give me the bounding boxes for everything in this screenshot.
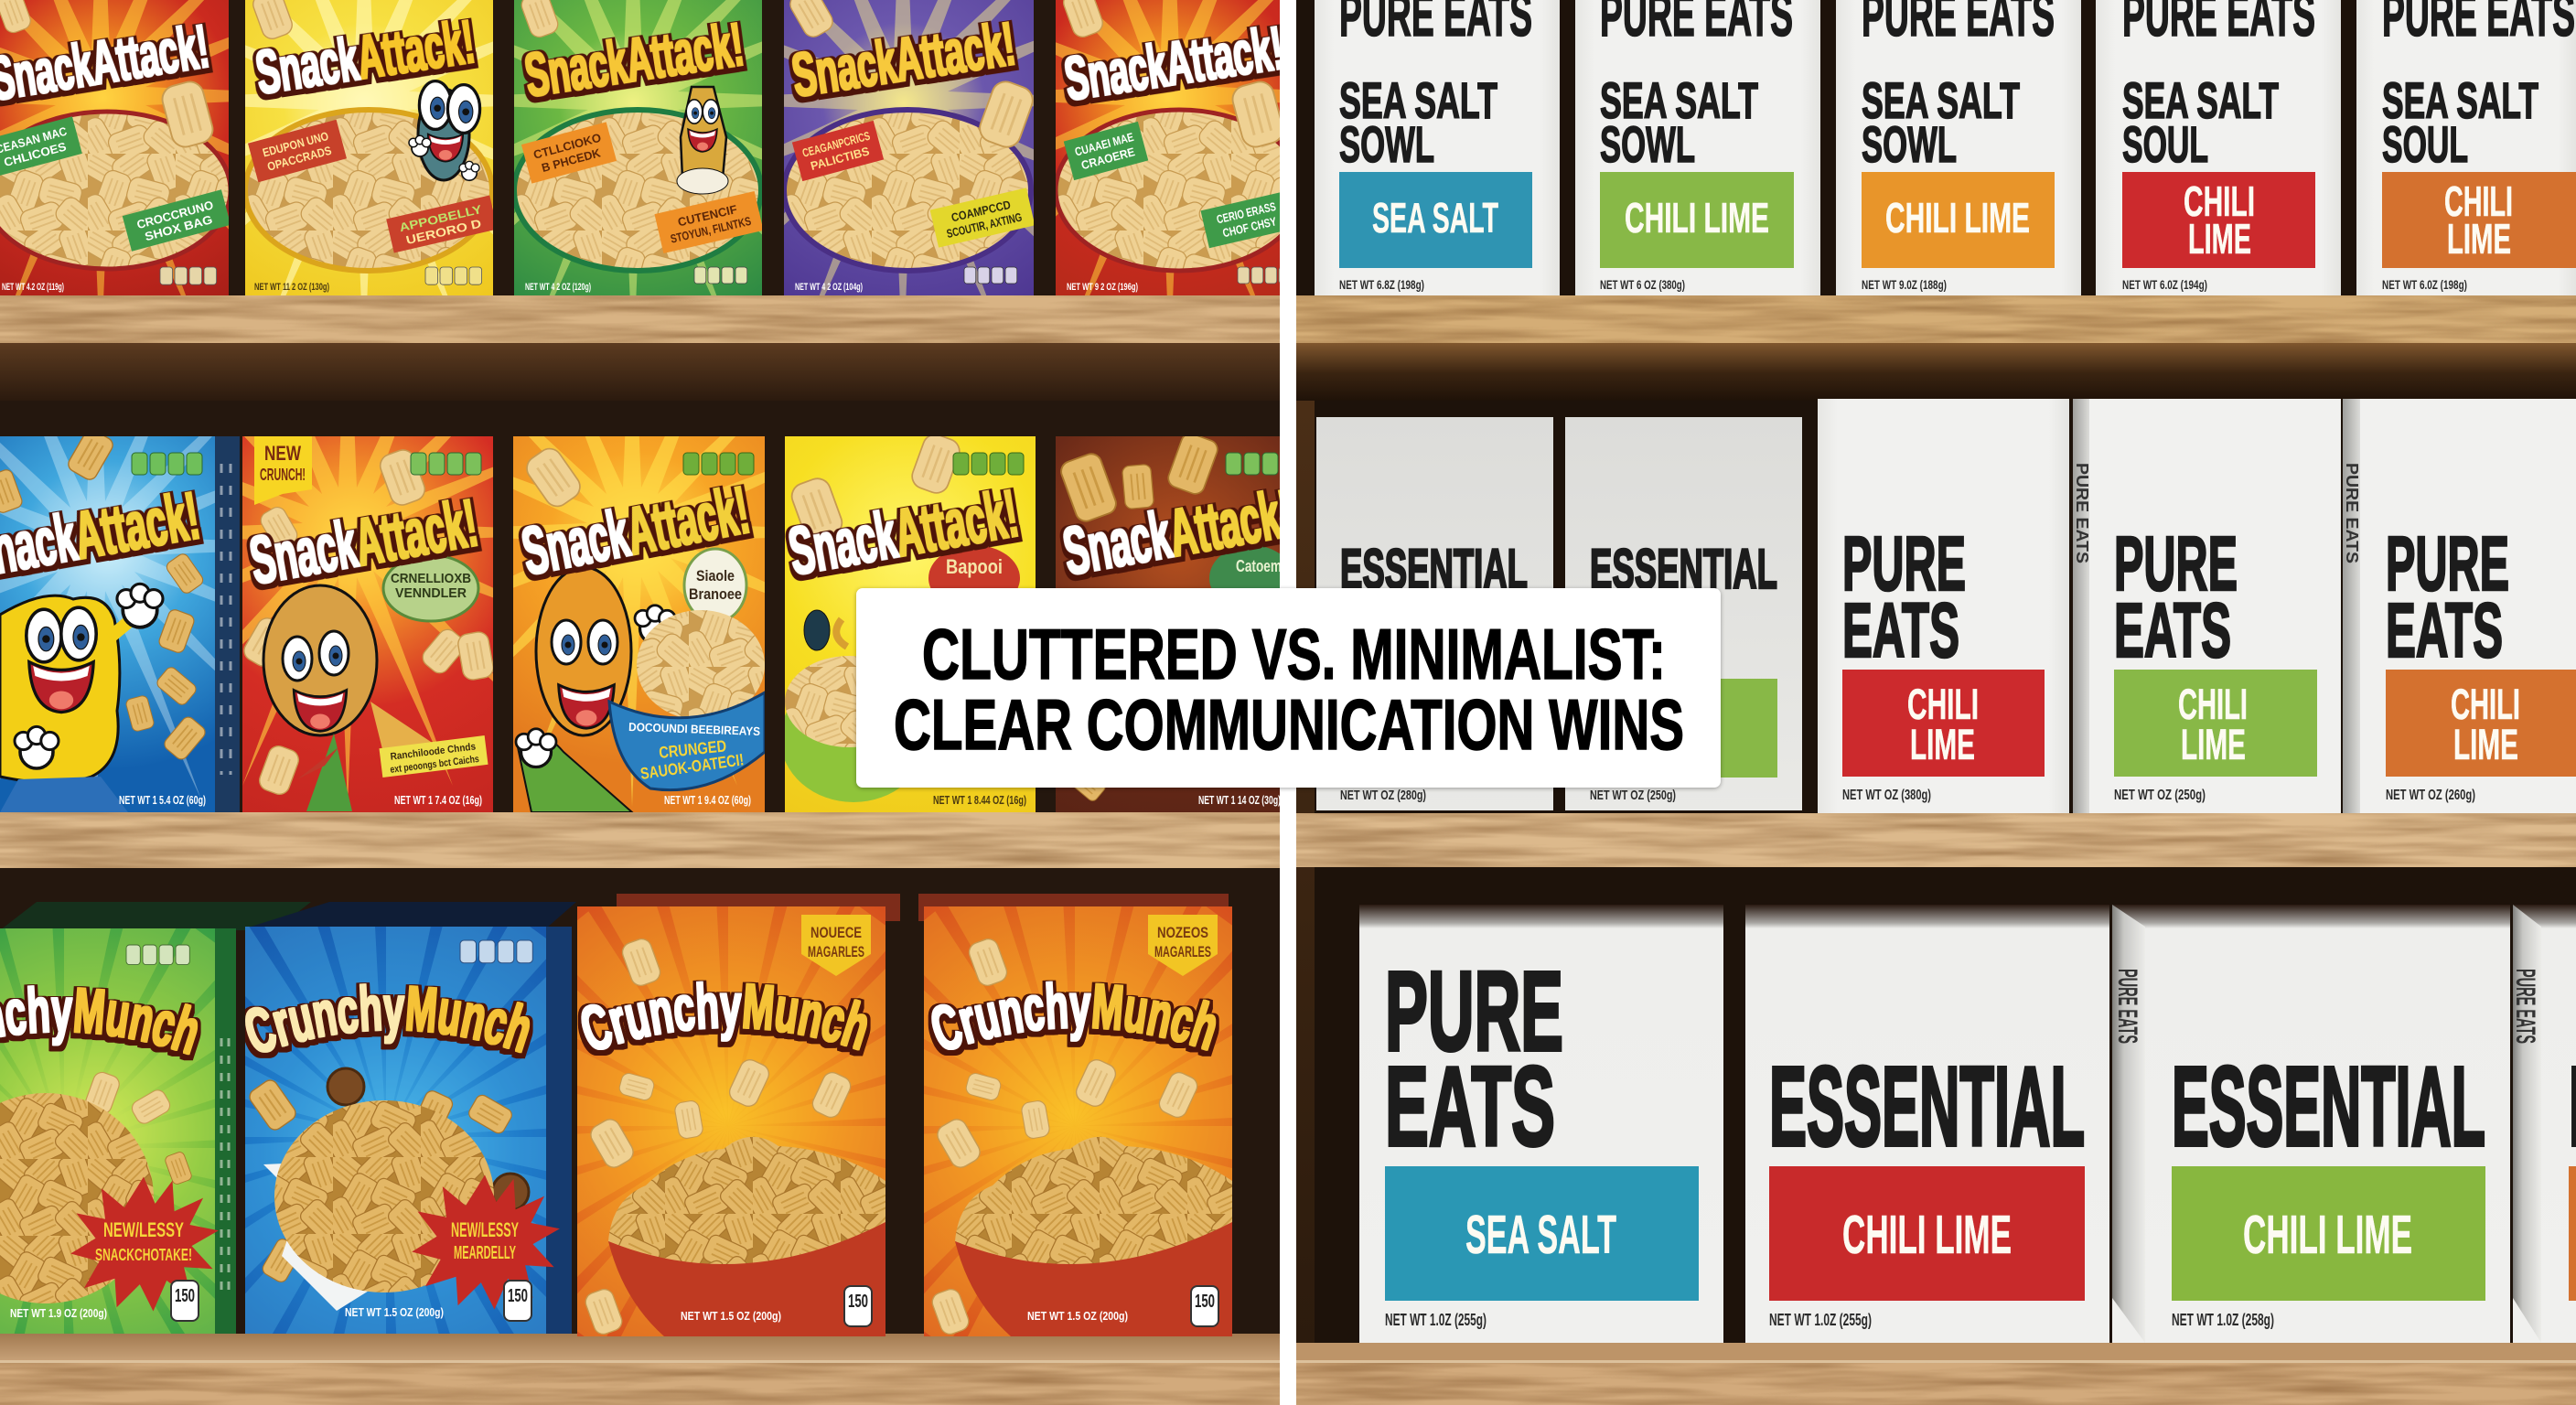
mascot: teal character: [409, 81, 480, 180]
150 badge: [504, 1281, 531, 1321]
nutrition icons: [132, 453, 202, 475]
shelf board: top right: [1296, 295, 2576, 401]
box: Essential green bottom row: [2112, 905, 2510, 1343]
box: SnackAttack red top row: [0, 0, 229, 295]
net weight: NET WT OZ (280g): [1340, 788, 1426, 803]
red oval: [928, 545, 1020, 611]
net weight: NET WT OZ (250g): [1590, 788, 1676, 803]
150 badge: 150: [508, 1286, 528, 1306]
box: CrunchyMunch blue bottom row: [245, 927, 572, 1334]
box: SnackAttack yellow top row: [245, 0, 493, 295]
banner: red lower: UERORO D: [404, 217, 483, 247]
150 badge: 150: [175, 1286, 195, 1306]
net weight: NET WT 4 2 OZ (104g): [795, 282, 863, 293]
color block: chili lime: LIME: [2181, 720, 2246, 768]
box: CrunchyMunch orange bottom row right: [924, 906, 1232, 1336]
net weight: NET WT 9.0Z (188g): [1862, 277, 1947, 292]
banner: orange lower: CUTENCIF: [676, 202, 738, 229]
nutrition icons: [411, 453, 481, 475]
box: CrunchyMunch green bottom row: [0, 928, 236, 1334]
nutrition icons: [694, 267, 747, 284]
bowl: blue with cereal: [609, 610, 765, 790]
speech bubble: [383, 555, 478, 621]
color block: chili lime: [1769, 1166, 2085, 1301]
speech bubble: [684, 549, 746, 622]
box tops behind bottom row: [3, 894, 1229, 930]
box: Pure Eats sea salt top row: [1315, 0, 1560, 295]
banner: yellow lower: COAMPCCD: [950, 198, 1012, 224]
box: Essential red bottom row: [1745, 905, 2109, 1343]
box: Pure Eats sea salt bottom row: [1359, 905, 1723, 1343]
shelf board: middle left: [0, 812, 1280, 868]
box: Pure Eats orange middle row: [2343, 399, 2576, 813]
150 badge text: 150: [848, 1292, 868, 1312]
banner: yellow: [379, 735, 488, 778]
banner: green upper: CUAAEI MAE: [1073, 130, 1135, 159]
bowl: blue with cereal: CRUNGED: [658, 736, 727, 762]
nutrition icons: [460, 940, 532, 963]
banner: red upper: PALICTIBS: [809, 144, 871, 173]
panel: cluttered shelves: [0, 0, 1280, 1405]
box: Pure Eats green middle row: [2073, 399, 2341, 813]
speech bubble: CRNELLIOXB: [391, 571, 471, 586]
box: Pure Eats sea salt top row: SOWL: [1339, 115, 1434, 173]
banner: red lower: APPOBELLY: [398, 202, 483, 234]
banner: orange upper: [521, 122, 617, 184]
nutrition icons: [964, 267, 1017, 284]
box: SnackAttack red top row right: [1056, 0, 1281, 295]
nutrition icons: [425, 267, 482, 284]
color block: chili lime: CHILI: [1907, 680, 1979, 728]
box: Pure Eats green top row: [1575, 0, 1820, 295]
banner: orange upper: B PHCEDK: [540, 145, 603, 175]
color block: sea salt: SEA SALT: [1465, 1205, 1616, 1265]
color block: chili lime stacked: LIME: [2188, 215, 2251, 263]
net weight: NET WT 1.9 OZ (200g): [10, 1306, 107, 1320]
mascot: cookie: [263, 585, 453, 811]
shelf board: middle right: [1296, 813, 2576, 867]
box: SnackAttack red middle row: [242, 436, 493, 812]
badge: new crunch: CRUNCH!: [260, 466, 306, 484]
speech bubble: Branoee: [689, 585, 742, 603]
box: Pure Eats green middle row: EATS: [2114, 587, 2231, 673]
banner: red upper: OPACCRADS: [265, 144, 333, 174]
color block: sea salt: [1385, 1166, 1699, 1301]
banner: green upper: [1064, 122, 1148, 180]
banner: orange upper: CTLLCIOKO: [531, 131, 603, 162]
color block: chili lime: [2172, 1166, 2485, 1301]
speech bubble: VENNDLER: [395, 585, 467, 601]
box: Pure Eats red top row: [2096, 0, 2341, 295]
cropped color block: [2569, 1166, 2576, 1301]
banner: red upper: CEAGANPCRICS: [800, 129, 872, 160]
banner: yellow lower: [930, 188, 1035, 248]
box: CrunchyMunch orange bottom row: [577, 906, 886, 1336]
color block: chili lime: [2386, 670, 2576, 777]
net weight: NET WT 1.0Z (258g): [2172, 1311, 2274, 1329]
net weight: NET WT OZ (260g): [2386, 788, 2475, 803]
net weight: NET WT 1.5 OZ (200g): [681, 1309, 781, 1323]
box: SnackAttack brown middle row: [1056, 436, 1281, 812]
net weight: NET WT 1.0Z (255g): [1385, 1311, 1487, 1329]
side print: PURE EATS: [2073, 463, 2091, 563]
nutrition icons: [1238, 267, 1291, 284]
net weight: NET WT 6.0Z (194g): [2122, 277, 2207, 292]
box: Essential left middle row: [1316, 417, 1553, 810]
brand: PURE: [1385, 949, 1563, 1075]
box: Pure Eats green top row: SOWL: [1600, 115, 1695, 173]
badge text: NOUECE: [810, 924, 862, 941]
banner: red upper: [792, 121, 884, 181]
mascot: yellow sponge: [0, 584, 163, 812]
shelf board: bottom left: [0, 1334, 1280, 1405]
banner: green upper: CRAOERE: [1079, 145, 1136, 172]
net weight: NET WT 6.8Z (198g): [1339, 277, 1424, 292]
green bubble: [1209, 545, 1293, 611]
badge text: NOZEOS: [1157, 924, 1208, 941]
box: SnackAttack purple top row: [784, 0, 1034, 295]
banner: green upper: [0, 116, 82, 177]
starburst: new: NEW/LESSY: [103, 1218, 184, 1241]
color block: chili lime stacked: [2382, 172, 2576, 268]
box: Pure Eats orange top row: SOWL: [1862, 115, 1957, 173]
color block: chili lime: [2114, 670, 2317, 777]
net weight: NET WT 11 2 OZ (130g): [254, 282, 329, 293]
color block: chili lime: CHILI: [2178, 680, 2248, 728]
color block: chili lime stacked: [2122, 172, 2315, 268]
color block: chili lime: LIME: [1910, 720, 1975, 768]
banner: red upper: EDUPON UNO: [261, 129, 330, 160]
box: SnackAttack green top row: [514, 0, 762, 295]
banner: red upper: [248, 120, 347, 182]
net weight: NET WT 6 OZ (380g): [1600, 277, 1685, 292]
nutrition icons: [160, 267, 217, 284]
net weight: NET WT 9 2 OZ (196g): [1067, 282, 1138, 293]
starburst: new: NEW/LESSY: [451, 1218, 519, 1241]
box: cropped bottom row right: [2513, 905, 2576, 1343]
net weight: NET WT 6.0Z (198g): [2382, 277, 2467, 292]
banner: green lower: CROCCRUNO: [135, 198, 215, 231]
box: Pure Eats dark orange top row: [2356, 0, 2576, 295]
banner: green upper: CHLICOES: [3, 139, 68, 169]
starburst: new: MEARDELLY: [454, 1243, 516, 1263]
box: SnackAttack orange middle row: [513, 436, 765, 812]
color block: green: [1590, 679, 1777, 778]
shelf board: top left: [0, 295, 1280, 401]
color block: chili lime stacked: LIME: [2447, 215, 2511, 263]
starburst: new: SNACKCHOTAKE!: [95, 1246, 192, 1264]
box: Pure Eats red middle row: [1818, 399, 2069, 813]
net weight: NET WT 4.2 OZ (119g): [2, 282, 64, 293]
badge: new crunch: [254, 436, 312, 505]
title card: [856, 588, 1721, 788]
color block: chili lime: [1600, 172, 1794, 268]
side print: PURE EATS: [2343, 463, 2361, 563]
color block: chili lime stacked: CHILI: [2444, 177, 2513, 225]
speech bubble: Siaole: [696, 567, 735, 585]
box: CrunchyMunch blue bottom row: CrunchyMunch: [245, 982, 533, 1059]
brand: PURE: [1842, 520, 1966, 606]
shelf board: bottom right: [1296, 1343, 2576, 1405]
banner: yellow: Ranchiloode Chnds: [390, 741, 477, 763]
150 badge text: 150: [1195, 1292, 1215, 1312]
net weight: NET WT OZ (380g): [1842, 788, 1931, 803]
badge: new crunch: NEW: [264, 442, 301, 465]
nutrition icons: [126, 945, 189, 965]
net weight: NET WT OZ (250g): [2114, 788, 2206, 803]
color block: chili lime: [1862, 172, 2055, 268]
net weight: NET WT 1.5 OZ (200g): [1027, 1309, 1128, 1323]
cabinet side strip: [1296, 401, 1315, 1343]
panel: minimalist shelves: [1296, 0, 2576, 1405]
red oval: Bapooi: [946, 555, 1003, 578]
box: Pure Eats dark orange top row: SOUL: [2382, 115, 2468, 173]
box: Pure Eats orange top row: [1836, 0, 2081, 295]
150 badge: [171, 1281, 199, 1321]
banner: green lower: [123, 189, 231, 252]
mascot: orange peanut: [516, 567, 675, 812]
banner: green lower: SHOX BAG: [144, 212, 214, 243]
brand: PURE: [2114, 520, 2238, 606]
box: Pure Eats sea salt bottom row: EATS: [1385, 1045, 1555, 1170]
nutrition icons: [953, 453, 1024, 475]
net weight: NET WT 4 2 OZ (120g): [525, 282, 591, 293]
color block: chili lime: LIME: [2453, 720, 2518, 768]
banner: orange lower: [654, 191, 764, 253]
box: SnackAttack yellow middle row: [785, 436, 1036, 812]
net weight: NET WT 1.5 OZ (200g): [345, 1305, 444, 1319]
starburst: new: [412, 1174, 560, 1310]
nutrition icons: [683, 453, 754, 475]
net weight: NET WT 1.0Z (255g): [1769, 1311, 1872, 1329]
nutrition icons: [1226, 453, 1296, 475]
color block: sea salt: [1339, 172, 1532, 268]
box: Essential green bottom row: PURE EATS: [2112, 969, 2142, 1044]
banner: green lower: [1201, 191, 1294, 248]
box: Pure Eats red middle row: EATS: [1842, 587, 1959, 673]
box: Essential right middle row: [1565, 417, 1802, 810]
color block: chili lime stacked: CHILI: [2184, 177, 2255, 225]
color block: chili lime: [1842, 670, 2045, 777]
banner: red lower: [386, 195, 498, 253]
mascot and bowl fragment: [780, 610, 927, 802]
box: Pure Eats red top row: SOUL: [2122, 115, 2208, 173]
mascot: tan character: [677, 87, 728, 194]
color block: chili lime: CHILI: [2451, 680, 2520, 728]
starburst: new: [70, 1176, 219, 1312]
box: SnackAttack blue middle row: [0, 436, 240, 812]
